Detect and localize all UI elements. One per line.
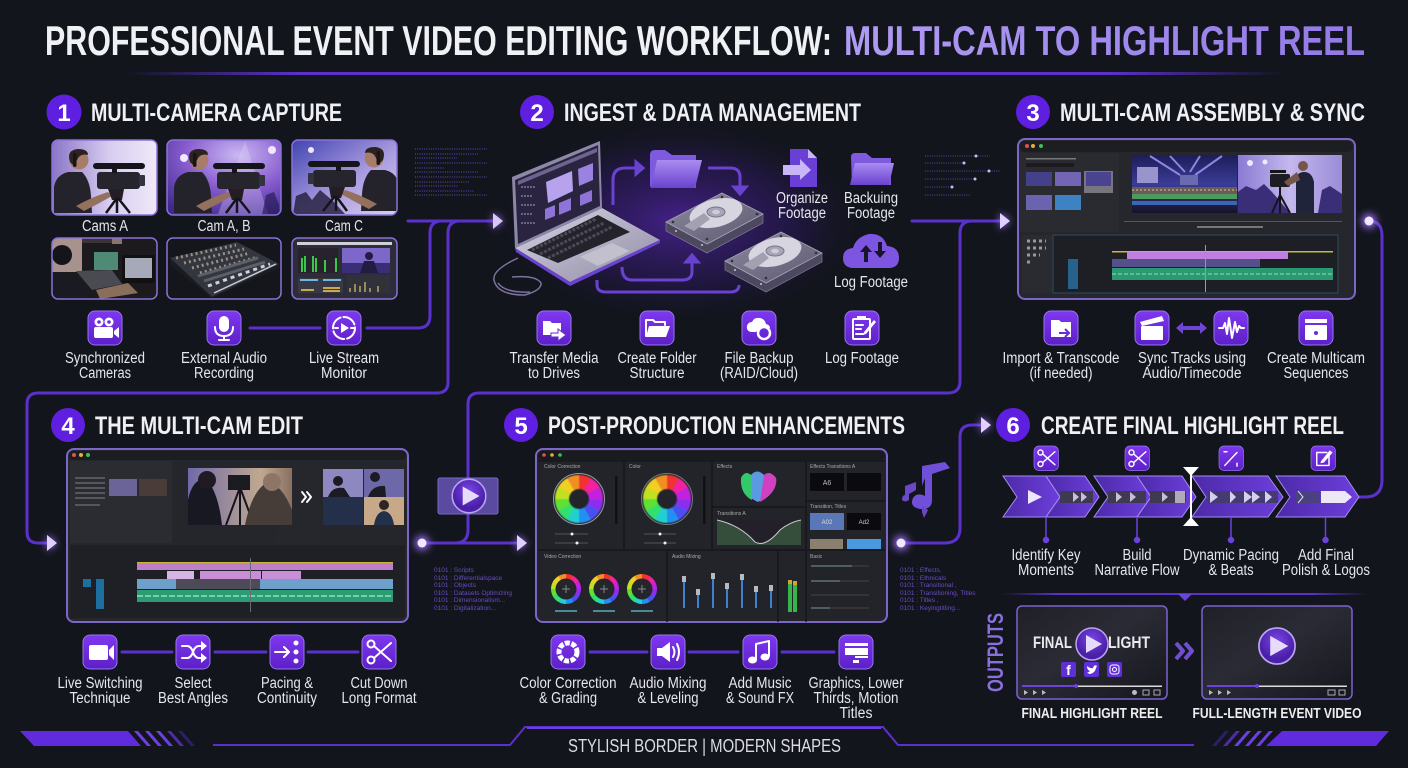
photo: control desk (52, 238, 157, 299)
arrowhead into step 5 (517, 535, 527, 551)
data text list right: 0101 : Transitioning, Titles (900, 590, 976, 597)
icon: music notes (902, 462, 950, 518)
editor window with color and audio tools: Color (629, 464, 641, 470)
illustration: cable (494, 258, 541, 295)
step 3 heading: 3 (1026, 100, 1040, 127)
label: select: Select (174, 675, 212, 692)
icon: cloud (843, 234, 899, 268)
label: file backup: (RAID/Cloud) (720, 365, 798, 382)
editor window (67, 449, 408, 622)
icon: color correction (551, 635, 585, 669)
editor window with color and audio tools: Video Correction (544, 554, 581, 560)
editor window with color and audio tools: Ad2 (859, 520, 870, 526)
label: dynamic pacing: & Beats (1208, 562, 1254, 579)
step 4 heading: THE MULTI-CAM EDIT (95, 412, 303, 440)
photo: audio mixer (167, 238, 281, 299)
label: cut down (342, 675, 417, 707)
chevron timeline (1003, 476, 1359, 517)
label: add music (726, 675, 795, 707)
label: graphics: Thirds, Motion (814, 690, 898, 707)
step 2 heading: INGEST & DATA MANAGEMENT (564, 99, 861, 127)
output captions: FULL-LENGTH EVENT VIDEO (1192, 706, 1362, 722)
panel: step 5 post-production (504, 408, 950, 722)
camera labels: Cam C (325, 218, 363, 235)
label: live stream: Live Stream (309, 350, 379, 367)
label: cut down: Long Format (342, 690, 417, 707)
label: pacing: Pacing & (261, 675, 314, 692)
label: organize footage: Organize (776, 190, 828, 207)
panel: step 6 final highlight reel (983, 408, 1370, 722)
label: add music: & Sound FX (726, 690, 795, 707)
label: build narrative flow: Narrative Flow (1094, 562, 1180, 579)
label: import (1002, 350, 1120, 382)
data text list left: 0101 : Objects (434, 582, 477, 589)
label: add final polish: Polish & Logos (1282, 562, 1370, 579)
label: sync tracks (1138, 350, 1246, 382)
playhead (1183, 467, 1199, 526)
label: graphics (808, 675, 904, 722)
photo: live stream monitor (292, 238, 397, 299)
label: multicam sequences (1267, 350, 1365, 382)
icon: synchronized cameras (88, 311, 122, 345)
label: external audio: External Audio (181, 350, 267, 367)
label: build narrative flow: Build (1122, 547, 1152, 564)
output card: final highlight reel: LIGHT (1108, 633, 1151, 652)
data text list left: 0101 : Differentialspace (434, 575, 503, 582)
label: file backup: File Backup (724, 350, 794, 367)
decorative data dots 1 (415, 149, 487, 195)
step 4 heading: 4 (61, 413, 75, 440)
editor window with color and audio tools: Transition, Titles (810, 504, 847, 510)
label: synchronized cameras: Cameras (79, 365, 131, 382)
step 5 heading: POST-PRODUCTION ENHANCEMENTS (548, 412, 905, 440)
icon: create folder (640, 311, 674, 345)
label: audio mixing: & Leveling (638, 690, 698, 707)
play widget between steps (438, 478, 498, 514)
editor window with color and audio tools: Color Correction (544, 464, 581, 470)
icon: log footage (845, 311, 879, 345)
label: synchronized cameras: Synchronized (65, 350, 145, 367)
editor window with color and audio tools: Effects Transitions A (810, 464, 856, 470)
label: add final polish: Add Final (1298, 547, 1354, 564)
label: color correction (520, 675, 616, 707)
camera labels: Cam A, B (198, 218, 250, 235)
panel: step 3 multi-cam assembly (1002, 95, 1365, 382)
step 4 heading (51, 408, 303, 442)
panel: step 2 ingest (485, 95, 908, 382)
icon: backup folder (850, 153, 894, 185)
camera labels: Cams A (82, 218, 129, 235)
output card: final highlight reel: FINAL (1033, 633, 1072, 652)
title: PROFESSIONAL EVENT VIDEO EDITING WORKFLOW: (45, 17, 832, 64)
label: select: Best Angles (158, 690, 228, 707)
label: audio mixing: Audio Mixing (630, 675, 706, 692)
icon: waveform (1214, 311, 1248, 345)
label: external audio (181, 350, 267, 382)
icon: pacing (270, 635, 304, 669)
icon: add music (743, 635, 777, 669)
arrowhead into step 6 (981, 417, 991, 433)
editor window with color and audio tools: Basic (810, 554, 823, 560)
photo: cam A, B (167, 140, 281, 215)
label: file backup (720, 350, 798, 382)
label: live switching (58, 675, 142, 707)
connector dot step 5 (894, 536, 908, 550)
label: live stream: Monitor (321, 365, 367, 382)
label: live switching: Live Switching (58, 675, 142, 692)
icon: file backup (742, 311, 776, 345)
data text list right: 0101 : Titles , (900, 597, 939, 604)
label: transfer media (510, 350, 599, 382)
illustration: hard drive 2 (725, 232, 822, 292)
icon: organize footage document (783, 149, 817, 187)
label: pacing: Continuity (257, 690, 317, 707)
data text list left: 0101 : Scripts (434, 567, 474, 574)
output captions (1022, 706, 1362, 722)
editor window with color and audio tools: Transitions A (717, 511, 746, 517)
connector dot step 3 (1362, 214, 1376, 228)
panel: step 4 multi-cam edit (51, 408, 417, 707)
output card: final highlight reel: f (1066, 662, 1071, 678)
data text list left (434, 567, 512, 612)
label: graphics: Titles (840, 705, 873, 722)
label: sync tracks: Sync Tracks using (1138, 350, 1246, 367)
output captions: FINAL HIGHLIGHT REEL (1022, 706, 1163, 722)
footer border (20, 727, 1389, 746)
editor window (1018, 139, 1355, 299)
icon: cut (362, 635, 396, 669)
label: audio mixing (630, 675, 706, 707)
illustration: folder (650, 150, 702, 188)
camera labels (82, 218, 363, 235)
label: synchronized cameras (65, 350, 145, 382)
glow (485, 117, 875, 327)
icon: live switching (83, 635, 117, 669)
data text list right: 0101 : Effects, (900, 567, 942, 574)
label: import: (if needed) (1030, 365, 1092, 382)
arrowhead into step 4 (47, 535, 57, 551)
label: identify key moments (1012, 547, 1081, 579)
label: identify key moments: Identify Key (1012, 547, 1081, 564)
step 5 heading: 5 (514, 413, 528, 440)
icon: audio mixing (651, 635, 685, 669)
label: live switching: Technique (70, 690, 130, 707)
photo: cams A (52, 140, 157, 215)
double chevron (1176, 643, 1192, 659)
data text list right (900, 567, 976, 612)
editor window with color and audio tools (536, 449, 887, 622)
editor window with color and audio tools: A6 (823, 480, 831, 487)
label: backuing footage: Backuing (844, 190, 898, 207)
label: select (158, 675, 228, 707)
label: add final polish (1282, 547, 1370, 579)
connector dot step 4 (415, 536, 429, 550)
arrowhead into step 2 (493, 213, 503, 229)
label: backuing footage (844, 190, 898, 222)
step 1 heading: MULTI-CAMERA CAPTURE (91, 99, 342, 127)
step 2 heading (520, 95, 861, 129)
icon: scissors 2 (1125, 446, 1149, 470)
illustration: hard drive 1 (666, 193, 763, 253)
label: multicam sequences: Sequences (1284, 365, 1349, 382)
stems with dots (1044, 517, 1328, 542)
icon: import (1044, 311, 1078, 345)
flow connectors (27, 221, 1382, 543)
label: create folder: Create Folder (618, 350, 696, 367)
label: graphics: Graphics, Lower (808, 675, 904, 692)
icon: edit (1311, 446, 1335, 470)
photo: cam C (292, 140, 399, 215)
label: multicam sequences: Create Multicam (1267, 350, 1365, 367)
label: pacing (257, 675, 317, 707)
footer caption: STYLISH BORDER | MODERN SHAPES (568, 736, 841, 756)
decorative data dots 2 (925, 154, 1000, 195)
label: organize footage: Footage (778, 205, 826, 222)
label: transfer media: to Drives (528, 365, 580, 382)
label: color correction: & Grading (539, 690, 597, 707)
icon: external audio (207, 311, 241, 345)
icon: transfer media (537, 311, 571, 345)
icon: graphics (839, 635, 873, 669)
label: sync tracks: Audio/Timecode (1142, 365, 1242, 382)
double arrow (1176, 322, 1207, 334)
step 3 heading (1016, 95, 1365, 129)
illustration: laptop (512, 141, 660, 286)
data text list left: 0101 : Datasets Optimizing (434, 590, 512, 597)
label: log footage upper: Log Footage (834, 274, 908, 291)
label: import: Import & Transcode (1002, 350, 1120, 367)
process arrows (597, 162, 746, 292)
step 6 heading: 6 (1006, 413, 1020, 440)
label: live stream (309, 350, 379, 382)
label: create folder (618, 350, 696, 382)
editor window with color and audio tools: A02 (822, 520, 833, 526)
editor window with color and audio tools: Audio Mixing (672, 554, 701, 560)
data text list right: 0101 : Ethnicals (900, 575, 947, 582)
step 1 heading (46, 94, 342, 130)
label: transfer media: Transfer Media (510, 350, 599, 367)
label: external audio: Recording (194, 365, 254, 382)
icon: live stream monitor (327, 311, 361, 345)
output card: full length video (1202, 606, 1352, 699)
data text list left: 0101 : Digitalization... (434, 605, 496, 612)
step 6 heading (996, 408, 1344, 442)
data text list right: 0101 : Transitional , (900, 582, 957, 589)
label: dynamic pacing: Dynamic Pacing (1183, 547, 1279, 564)
outputs label: OUTPUTS (983, 613, 1008, 692)
output card: final highlight reel (1017, 606, 1167, 699)
label: build narrative flow (1094, 547, 1180, 579)
label: identify key moments: Moments (1018, 562, 1074, 579)
label: dynamic pacing (1183, 547, 1279, 579)
label: color correction: Color Correction (520, 675, 616, 692)
icon: scissors 1 (1034, 446, 1058, 470)
label: cut down: Cut Down (350, 675, 408, 692)
label: backuing footage: Footage (847, 205, 895, 222)
label: organize footage (776, 190, 828, 222)
icon: select best angles (176, 635, 210, 669)
icon: multicam sequences (1299, 311, 1333, 345)
outputs divider (1002, 593, 1367, 601)
label: create folder: Structure (630, 365, 684, 382)
label: add music: Add Music (728, 675, 792, 692)
step 2 heading: 2 (530, 100, 544, 127)
step 1 heading: 1 (57, 100, 71, 127)
panel: step 1 multi-camera capture (46, 94, 399, 382)
data text list right: 0101 : Keyingtitling... (900, 605, 961, 612)
arrowhead into step 3 (1000, 213, 1010, 229)
data text list left: 0101 : Dimensionalism... (434, 597, 505, 604)
label: log footage: Log Footage (825, 350, 899, 367)
editor window with color and audio tools: Effects (717, 464, 733, 470)
icon: sync clapper (1135, 311, 1169, 345)
icon: magic wand (1219, 446, 1243, 470)
step 5 heading (504, 408, 905, 442)
